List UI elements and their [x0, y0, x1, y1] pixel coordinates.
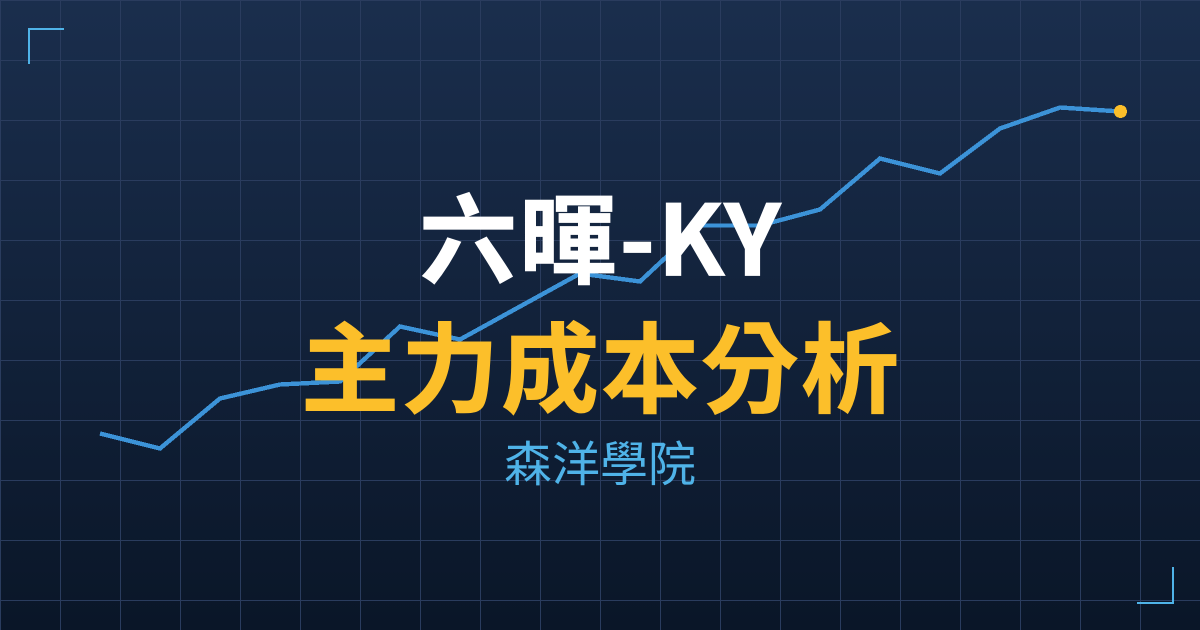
title: company name: 六暉-KY	[419, 162, 783, 304]
end point marker	[1114, 105, 1127, 118]
price line chart	[100, 105, 1127, 448]
subtitle: brand: 森洋學院	[504, 425, 696, 495]
corner bracket: top left	[29, 29, 64, 64]
corner bracket: bottom right	[1137, 567, 1173, 603]
heading: analysis: 主力成本分析	[301, 292, 901, 434]
